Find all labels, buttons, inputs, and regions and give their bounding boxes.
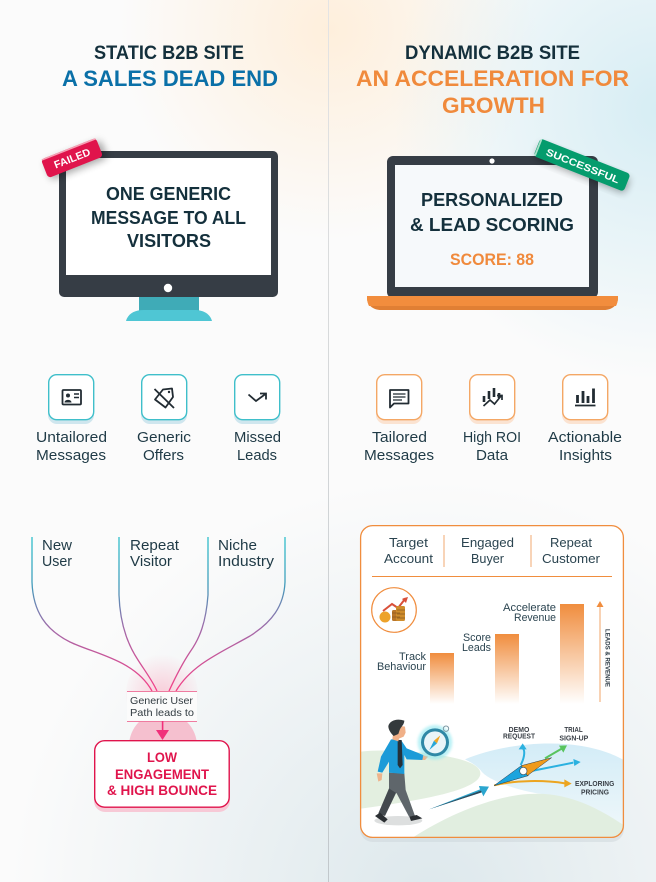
outcome box — [94, 741, 230, 812]
path label — [127, 691, 197, 722]
segment labels: New — [42, 538, 73, 554]
lead score: SCORE: 88 — [450, 251, 534, 269]
journey stage headers: Target — [389, 535, 428, 550]
icon: crossed tag — [141, 375, 187, 424]
laptop — [367, 156, 618, 310]
successful badge: SUCCESSFUL — [544, 147, 621, 186]
journey stage headers: Buyer — [471, 551, 505, 566]
segment labels: Industry — [218, 554, 275, 570]
desktop monitor — [59, 151, 278, 321]
destination labels: PRICING — [581, 789, 609, 796]
monitor message: MESSAGE TO ALL — [91, 207, 246, 228]
destination labels: TRIAL — [564, 727, 583, 734]
bar chart: leads and revenue: Revenue — [514, 612, 556, 624]
bar chart: leads and revenue: Accelerate — [503, 602, 556, 614]
left feature: missed leads: Missed — [234, 430, 281, 446]
heading: static B2B site: STATIC B2B SITE — [94, 43, 244, 64]
flow lines — [32, 537, 285, 691]
right feature: actionable insights: Insights — [559, 448, 612, 464]
destination labels: EXPLORING — [575, 781, 614, 788]
left feature: missed leads: Leads — [237, 448, 277, 464]
icon: id card — [48, 375, 94, 424]
segment labels: Visitor — [130, 554, 172, 570]
journey stage headers: Repeat — [550, 535, 592, 550]
right feature: actionable insights: Actionable — [548, 430, 622, 446]
right feature: tailored messages: Tailored — [372, 430, 427, 446]
laptop message: PERSONALIZED — [421, 189, 563, 210]
person — [375, 720, 428, 823]
icon: trending down arrow — [234, 375, 280, 424]
heading: static B2B site: A SALES DEAD END — [62, 66, 278, 91]
funnel flow diagram — [32, 537, 285, 812]
journey stage headers: Customer — [542, 551, 601, 566]
segment labels: User — [42, 554, 72, 570]
destination labels: DEMO — [509, 727, 530, 734]
outcome box: & HIGH BOUNCE — [107, 783, 217, 798]
right feature: high ROI data: Data — [476, 448, 509, 464]
left feature: untailored messages: Untailored — [36, 430, 107, 446]
travel arrow — [429, 786, 489, 809]
bar chart: leads and revenue: Score — [463, 632, 491, 644]
destination labels: SIGN-UP — [559, 735, 589, 742]
laptop message: & LEAD SCORING — [410, 214, 574, 235]
left feature: untailored messages — [36, 375, 107, 464]
bar chart: leads and revenue: Track — [399, 651, 426, 663]
outcome box: ENGAGEMENT — [115, 767, 210, 782]
path label: Path leads to — [130, 707, 194, 719]
left feature: untailored messages: Messages — [36, 448, 106, 464]
bar chart: leads and revenue — [377, 602, 584, 704]
right feature: tailored messages — [364, 375, 434, 464]
monitor message: ONE GENERIC — [106, 183, 231, 204]
axis arrow — [596, 601, 604, 702]
outcome box: LOW — [147, 750, 177, 765]
destination labels — [503, 727, 614, 796]
left feature: generic offers: Offers — [143, 448, 184, 464]
successful badge — [533, 138, 632, 194]
bar chart: leads and revenue: Behaviour — [377, 661, 426, 673]
segment labels: Niche — [218, 538, 257, 554]
monitor message — [91, 183, 246, 251]
icon: handheld compass — [418, 725, 452, 760]
journey illustration — [360, 720, 625, 838]
heading: dynamic B2B site: AN ACCELERATION FOR — [356, 66, 629, 91]
person with compass — [374, 720, 452, 825]
left feature: missed leads — [234, 375, 281, 464]
path label: Generic User — [130, 695, 194, 707]
right feature: high ROI data: High ROI — [463, 430, 521, 446]
monitor message: VISITORS — [127, 230, 211, 251]
failed badge: FAILED — [52, 146, 93, 171]
heading: static B2B site — [62, 43, 278, 91]
icon: chat bubble — [376, 375, 422, 424]
segment labels — [42, 538, 275, 570]
destination labels: REQUEST — [503, 734, 536, 741]
right feature: high ROI data — [463, 375, 521, 464]
left feature: generic offers — [137, 375, 191, 464]
journey stage headers — [384, 535, 601, 566]
panel: buyer journey — [360, 526, 625, 842]
left feature: generic offers: Generic — [137, 430, 191, 446]
bar chart: leads and revenue: Leads — [462, 642, 491, 654]
icon: large compass needle and paths — [494, 743, 581, 787]
icon: bar chart — [562, 375, 608, 424]
failed badge — [41, 137, 107, 181]
segment labels: Repeat — [130, 538, 179, 554]
laptop message — [410, 189, 574, 235]
journey stage headers: Account — [384, 551, 433, 566]
journey stage headers: Engaged — [461, 535, 514, 550]
right feature: tailored messages: Messages — [364, 448, 434, 464]
right feature: actionable insights — [548, 375, 622, 464]
heading: dynamic B2B site — [356, 43, 629, 118]
pink half circle — [129, 712, 197, 780]
heading: dynamic B2B site: GROWTH — [442, 93, 545, 118]
arrow down — [156, 721, 169, 740]
icon: bars with trend arrow — [469, 375, 515, 424]
heading: dynamic B2B site: DYNAMIC B2B SITE — [405, 43, 580, 64]
icon: coins and growth arrow — [372, 588, 416, 632]
axis label: LEADS & REVENUE — [604, 629, 610, 687]
